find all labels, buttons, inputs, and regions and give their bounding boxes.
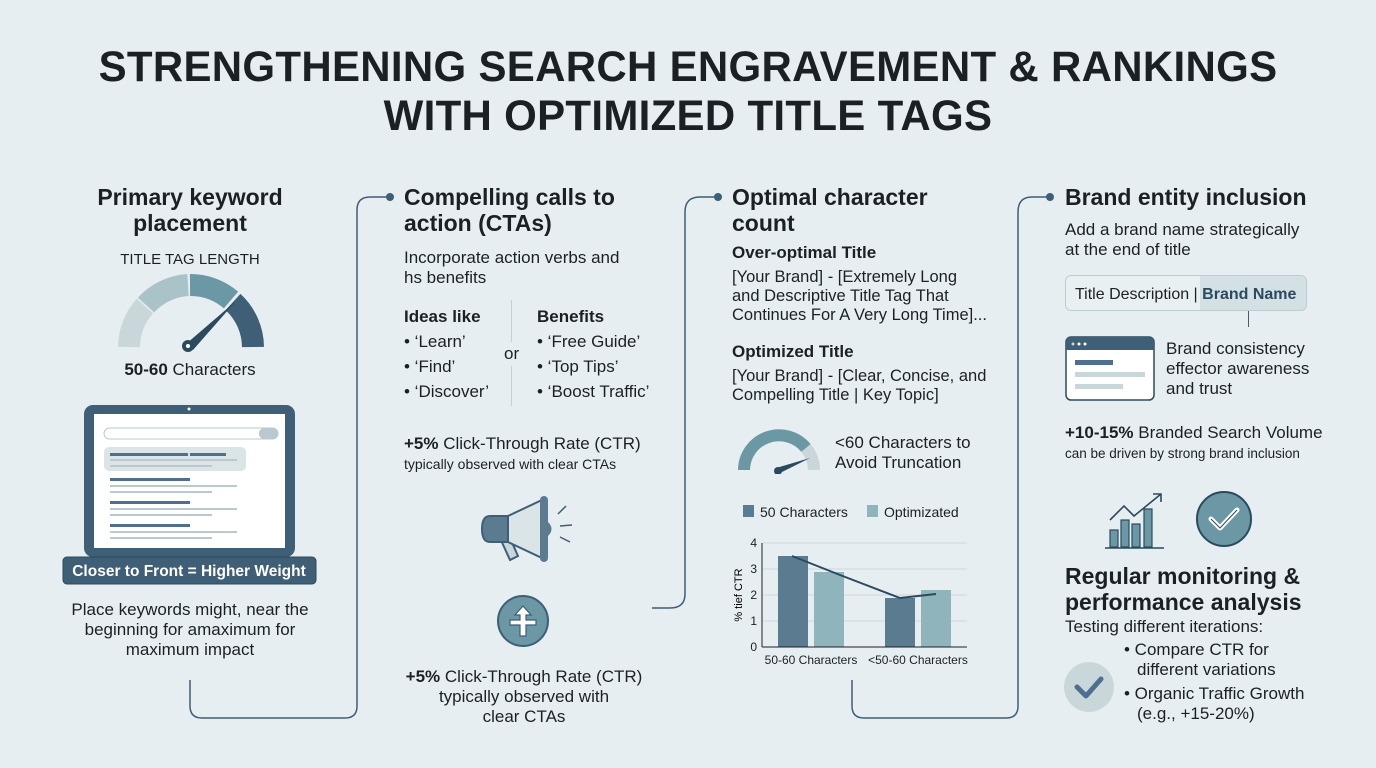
icon: check circle [1196,491,1252,547]
stat: CTR: typically observed with clear CTAs [404,456,616,472]
list: monitoring bullets: • Organic Traffic Growth [1124,684,1304,703]
chart: CTR bars: 0 [750,640,757,654]
stat: branded search: +10-15% Branded Search Volume [1065,423,1323,442]
stat: CTR [404,434,641,472]
title bar example: Title Description | Brand Name [1075,286,1296,303]
list: benefits: • ‘Top Tips’ [537,357,619,376]
title: WITH OPTIMIZED TITLE TAGS [384,91,992,139]
over-optimal title: Continues For A Very Long Time]... [732,306,987,324]
heading: Optimal character count [732,184,928,236]
chart: CTR bars: Optimizated [884,504,959,520]
text: brand consistency: and trust [1166,379,1232,398]
chart: CTR bars: 3 [750,562,757,576]
optimized title [732,342,986,404]
chart: CTR bars: 50 Characters [760,504,848,520]
title bar example [1065,275,1307,311]
stat: branded search [1065,423,1323,461]
divider with or [511,300,512,406]
list: monitoring bullets [1124,640,1304,723]
icon: small gauge [738,429,820,474]
list: monitoring bullets: different variations [1137,660,1276,679]
heading: Compelling calls to action (CTAs) [404,184,615,236]
list: ideas: • ‘Learn’ [404,332,466,351]
text: truncation [835,433,971,472]
icon: laptop search results: Closer to Front = Higher Weight [72,563,306,580]
text: brand consistency: effector awareness [1166,359,1309,378]
text: truncation: Avoid Truncation [835,453,961,472]
text: brand consistency [1166,339,1309,398]
list: ideas [404,307,489,401]
panel: brand entity inclusion [1065,184,1323,461]
optimized title: Optimized Title [732,342,854,361]
gauge label: TITLE TAG LENGTH [120,251,260,268]
text: placement note: Place keywords might, near the beginning for amaximum for maximum impact [71,600,309,659]
list: benefits: • ‘Free Guide’ [537,332,640,351]
chart: CTR bars: <50-60 Characters [868,653,968,667]
optimized title: [Your Brand] - [Clear, Concise, and Compelling Title | Key Topic] [732,367,986,404]
title: STRENGTHENING SEARCH ENGRAVEMENT & RANKINGS [99,42,1277,90]
heading: Primary keyword placement [97,184,283,236]
icon: megaphone [481,496,572,562]
chart: CTR bars: % tief CTR [733,568,745,622]
list: monitoring bullets: (e.g., +15-20%) [1137,704,1255,723]
text: 50-60 characters: 50-60 Characters [124,360,256,379]
stat: branded search: can be driven by strong brand inclusion [1065,446,1300,461]
panel: regular monitoring [1064,563,1304,723]
chart: CTR bars: 50-60 Characters [765,653,857,667]
panel: optimal character count [732,184,987,667]
text: brand consistency: Brand consistency [1166,339,1305,358]
heading: Brand entity inclusion [1065,184,1307,210]
text: testing: Testing different iterations: [1065,617,1263,636]
panel: compelling CTAs: or [504,344,519,363]
list: benefits: • ‘Boost Traffic’ [537,382,649,401]
list: benefits [537,307,649,401]
icon: gauge [118,274,264,352]
chart: CTR bars: 1 [750,614,757,628]
chart: CTR bars: 4 [750,536,757,550]
icon: browser window [1065,336,1155,401]
over-optimal title: Over-optimal Title [732,243,876,262]
stat: CTR repeated: +5% Click-Through Rate (CTR) [406,667,642,686]
over-optimal title [732,243,987,324]
text: truncation: <60 Characters to [835,433,971,452]
list: monitoring bullets: • Compare CTR for [1124,640,1269,659]
icon: check circle light [1064,662,1114,712]
title [99,42,1277,139]
stat: CTR repeated [406,667,642,726]
stat: CTR repeated: typically observed with [439,687,609,706]
text: intro: Incorporate action verbs and hs benefits [404,248,619,287]
icon: laptop search results [62,405,316,584]
icon: growth chart [1105,493,1164,549]
stat: CTR repeated: clear CTAs [483,707,565,726]
list: benefits: Benefits [537,307,604,326]
chart: CTR bars [733,504,968,667]
list: ideas: Ideas like [404,307,481,326]
icon: up arrow circle [497,595,549,647]
text: intro: Add a brand name strategically at the end of title [1065,220,1299,259]
stat: CTR: +5% Click-Through Rate (CTR) [404,434,641,453]
chart: CTR bars: 2 [750,588,757,602]
list: ideas: • ‘Find’ [404,357,455,376]
over-optimal title: and Descriptive Title Tag That [732,287,949,305]
heading: Regular monitoring & performance analysis [1065,563,1302,615]
panel: primary keyword placement [62,184,316,659]
list: ideas: • ‘Discover’ [404,382,489,401]
panel: compelling CTAs [404,184,649,726]
over-optimal title: [Your Brand] - [Extremely Long [732,268,957,286]
